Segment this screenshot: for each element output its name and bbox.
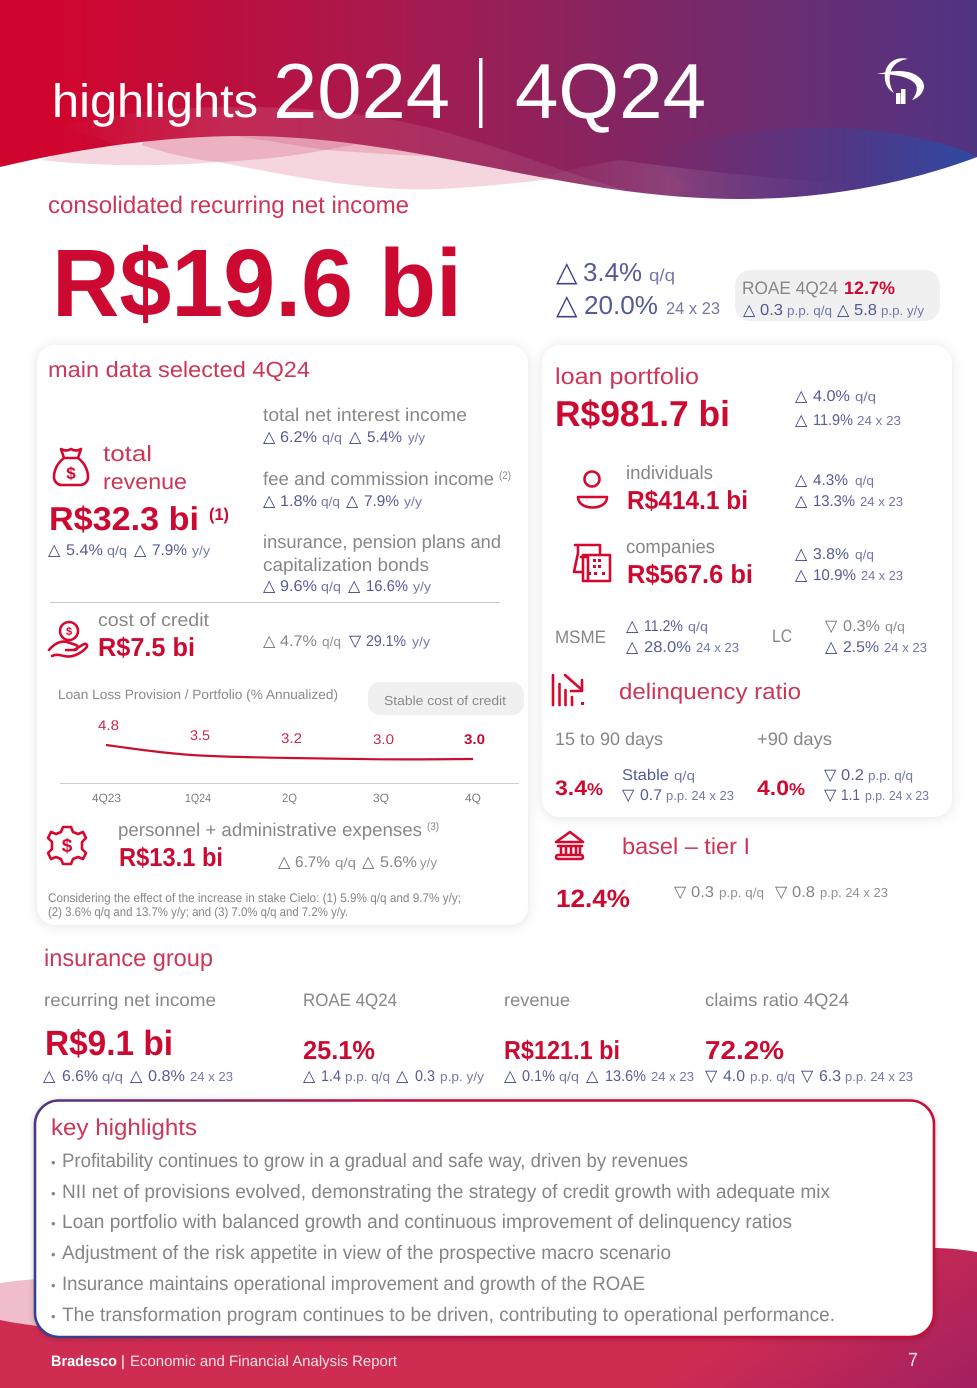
basel variations: ▽ [775, 882, 788, 901]
loan portfolio variations: 4.0% [813, 388, 850, 405]
companies: △ [795, 565, 808, 584]
insurance, pension plans and capitalization bonds: 9.6% [280, 578, 317, 595]
line chart: loan loss provision: 3.0 [464, 731, 485, 747]
cost of credit: ▽ [349, 631, 362, 650]
icon: buildings [574, 545, 610, 581]
fee and commission income: △ [346, 491, 359, 510]
personnel + administrative expenses: personnel + administrative expenses [118, 819, 422, 840]
insurance: claims ratio: 4.0 [723, 1068, 745, 1085]
insurance: revenue: revenue [504, 990, 570, 1010]
insurance: revenue: 0.1% [522, 1068, 555, 1085]
total revenue variations: q/q [107, 543, 127, 558]
bullet list: Insurance maintains operational improvement and growth of the ROAE [62, 1273, 645, 1295]
LC [772, 616, 927, 656]
personnel + administrative expenses: △ [362, 852, 375, 871]
total revenue label [103, 441, 187, 494]
companies: 24 x 23 [861, 568, 903, 583]
delinquency +90 days: p.p. q/q [868, 768, 913, 783]
insurance: recurring net income: q/q [102, 1069, 123, 1084]
insurance: revenue [504, 990, 694, 1085]
insurance: revenue: △ [586, 1066, 599, 1085]
heading: loan portfolio: loan portfolio [555, 363, 699, 389]
bullet list: • [51, 1278, 56, 1293]
icon: money bag: $ [66, 464, 76, 483]
personnel + administrative expenses: △ [278, 852, 291, 871]
insurance: ROAE: 1.4 [321, 1068, 341, 1085]
callout: ROAE: 12.7% [844, 278, 895, 298]
total revenue label: revenue [103, 469, 187, 494]
insurance: recurring net income: 24 x 23 [190, 1069, 233, 1084]
footer text: Bradesco [51, 1353, 117, 1370]
footnote [48, 891, 461, 919]
callout: ROAE: 0.3 [760, 302, 783, 319]
insurance: claims ratio: p.p. q/q [750, 1069, 795, 1084]
icon: hand with coin: $ [66, 626, 72, 638]
LC: 0.3% [843, 618, 880, 635]
MSME: 28.0% [644, 639, 691, 656]
insurance: ROAE: △ [303, 1066, 316, 1085]
footer wave [0, 1248, 977, 1388]
insurance: recurring net income: △ [130, 1066, 143, 1085]
individuals: △ [795, 470, 808, 489]
bullet list: • [51, 1216, 56, 1231]
total revenue value: (1) [209, 505, 229, 524]
LC: 24 x 23 [884, 640, 927, 655]
total net interest income: y/y [408, 430, 425, 445]
total net interest income: total net interest income [263, 404, 467, 425]
fee and commission income: (2) [499, 470, 511, 482]
basel variations: p.p. q/q [719, 885, 764, 900]
callout: ROAE: △ [743, 300, 756, 319]
personnel + administrative expenses: 5.6% [380, 854, 417, 871]
insurance, pension plans and capitalization bonds: q/q [321, 579, 341, 594]
basel variations: ▽ [674, 882, 687, 901]
insurance, pension plans and capitalization bonds: 16.6% [366, 578, 408, 595]
personnel + administrative expenses [118, 819, 439, 872]
cost of credit: cost of credit [98, 609, 209, 630]
big number: net income: R$19.6 bi [52, 230, 462, 337]
delinquency +90 days: ▽ [824, 785, 837, 804]
insurance: claims ratio: 72.2% [705, 1035, 784, 1065]
icon: hand with coin [49, 622, 87, 657]
insurance: recurring net income: 0.8% [148, 1068, 185, 1085]
total revenue variations [48, 540, 211, 559]
total revenue variations: 5.4% [66, 542, 103, 559]
total revenue variations: y/y [192, 543, 211, 558]
insurance: claims ratio: claims ratio 4Q24 [705, 990, 849, 1010]
delinquency +90 days: p.p. 24 x 23 [865, 788, 929, 803]
heading: key highlights: key highlights [51, 1114, 197, 1140]
insurance: claims ratio: 6.3 [819, 1068, 841, 1085]
insurance: ROAE: 25.1% [303, 1035, 375, 1065]
fee and commission income: 1.8% [280, 493, 317, 510]
footnote: (2) 3.6% q/q and 13.7% y/y; and (3) 7.0% q/q and 7.2% y/y. [48, 905, 348, 919]
fee and commission income: 7.9% [364, 493, 399, 510]
companies: △ [795, 544, 808, 563]
title [52, 47, 706, 135]
callout: ROAE: ROAE 4Q24 [742, 278, 838, 298]
individuals: △ [795, 491, 808, 510]
footer text: | [121, 1353, 125, 1370]
MSME: 24 x 23 [696, 640, 739, 655]
heading: basel tier I: basel – tier I [622, 833, 750, 859]
insurance: ROAE [303, 990, 485, 1085]
insurance, pension plans and capitalization bonds: capitalization bonds [263, 554, 429, 575]
personnel + administrative expenses: 6.7% [295, 854, 330, 871]
delinquency 15 to 90 days: ▽ [622, 785, 635, 804]
net income variations: 3.4% [583, 257, 642, 287]
icon: falling bars [553, 675, 584, 705]
total net interest income: 6.2% [280, 429, 317, 446]
total net interest income [263, 404, 467, 446]
callout: stable cost of credit [368, 682, 524, 715]
delinquency 15 to 90 days: 15 to 90 days [555, 729, 663, 749]
LC: ▽ [825, 616, 838, 635]
total revenue variations: 7.9% [152, 542, 187, 559]
cost of credit: △ [263, 631, 276, 650]
bullet list: • [51, 1155, 56, 1170]
line chart: loan loss provision: 2Q [282, 791, 297, 805]
header banner [0, 0, 977, 199]
insurance, pension plans and capitalization bonds: y/y [413, 579, 432, 594]
companies: R$567.6 bi [627, 559, 753, 589]
net income variations: △ [556, 255, 578, 288]
basel variations: 0.3 [691, 884, 714, 901]
bullet list: Loan portfolio with balanced growth and continuous improvement of delinquency ratios [62, 1211, 792, 1233]
basel value: 12.4% [556, 885, 630, 913]
footnote: Considering the effect of the increase in stake Cielo: (1) 5.9% q/q and 9.7% y/y; [48, 891, 461, 905]
icon: gear with dollar: $ [62, 836, 73, 857]
line chart: loan loss provision: 3.0 [373, 731, 394, 747]
delinquency 15 to 90 days: q/q [674, 768, 695, 783]
individuals: R$414.1 bi [627, 485, 748, 515]
delinquency +90 days: 4.0 [757, 777, 789, 800]
insurance: revenue: q/q [559, 1069, 579, 1084]
bullet list: • [51, 1186, 56, 1201]
basel variations [674, 882, 888, 901]
individuals: 4.3% [813, 472, 848, 489]
callout: ROAE: p.p. q/q [787, 303, 832, 318]
companies: 10.9% [813, 567, 856, 584]
panel: loan portfolio [542, 345, 952, 817]
heading: delinquency ratio: delinquency ratio [619, 679, 801, 704]
panel: main data selected [37, 345, 528, 925]
net income variations: 24 x 23 [666, 299, 720, 318]
delinquency +90 days: 1.1 [841, 787, 860, 804]
panel: key highlights [35, 1100, 934, 1337]
bullet list: • [51, 1309, 56, 1324]
callout: ROAE: △ [837, 300, 850, 319]
line chart: loan loss provision: 4.8 [98, 717, 119, 733]
title: 4Q24 [515, 47, 706, 135]
line chart: loan loss provision: 4Q [465, 791, 481, 805]
net income variations: 20.0% [584, 290, 658, 320]
individuals [626, 463, 903, 515]
LC: 2.5% [843, 639, 879, 656]
cost of credit [98, 609, 431, 662]
cost of credit: y/y [412, 634, 431, 649]
insurance: revenue: △ [504, 1066, 517, 1085]
companies [626, 537, 903, 589]
callout: ROAE: 5.8 [854, 302, 877, 319]
personnel + administrative expenses: q/q [335, 855, 356, 870]
cost of credit: 29.1% [366, 633, 406, 650]
LC: LC [772, 626, 792, 646]
basel variations: 0.8 [792, 884, 815, 901]
delinquency 15 to 90 days: p.p. 24 x 23 [666, 788, 734, 803]
net income variations: △ [556, 288, 578, 321]
total net interest income: △ [349, 427, 362, 446]
icon: money bag [54, 449, 88, 485]
fee and commission income: q/q [321, 494, 340, 509]
insurance: claims ratio: ▽ [705, 1066, 718, 1085]
personnel + administrative expenses: (3) [427, 821, 439, 833]
line chart: loan loss provision [60, 717, 519, 805]
bullet list [51, 1150, 835, 1326]
cost of credit: 4.7% [280, 633, 317, 650]
total revenue value: R$32.3 bi [49, 500, 199, 537]
loan portfolio value: R$981.7 bi [555, 393, 730, 434]
title: highlights [52, 74, 258, 127]
companies: companies [626, 537, 715, 558]
delinquency +90 days [757, 729, 929, 804]
insurance, pension plans and capitalization bonds: △ [263, 576, 276, 595]
MSME: △ [626, 616, 639, 635]
insurance: revenue: 13.6% [605, 1068, 646, 1085]
insurance: ROAE: p.p. y/y [440, 1069, 485, 1084]
insurance: ROAE: △ [396, 1066, 409, 1085]
MSME: MSME [555, 627, 606, 647]
callout: ROAE: p.p. y/y [881, 303, 924, 318]
loan portfolio variations: q/q [855, 389, 876, 404]
LC: △ [825, 637, 838, 656]
net income variations: q/q [649, 266, 675, 285]
insurance: recurring net income: recurring net income [44, 990, 216, 1010]
total revenue variations: △ [134, 540, 147, 559]
title: 2024 [273, 47, 450, 135]
insurance: ROAE: p.p. q/q [345, 1069, 390, 1084]
insurance: recurring net income: R$9.1 bi [45, 1024, 173, 1063]
icon: bank building [556, 832, 583, 859]
delinquency 15 to 90 days: Stable [622, 767, 669, 784]
line chart: loan loss provision: 3.2 [281, 730, 302, 746]
insurance, pension plans and capitalization bonds: insurance, pension plans and [263, 531, 501, 552]
MSME: △ [626, 637, 639, 656]
delinquency 15 to 90 days [555, 729, 734, 804]
basel variations: p.p. 24 x 23 [820, 885, 888, 900]
bullet list: Adjustment of the risk appetite in view of the prospective macro scenario [62, 1242, 671, 1264]
icon: bank logo [877, 58, 924, 104]
insurance: recurring net income [43, 990, 233, 1085]
icon: gear with dollar [48, 827, 86, 864]
individuals: 24 x 23 [860, 494, 903, 509]
line chart: loan loss provision: 3Q [373, 791, 389, 805]
heading: consolidated recurring net income: consolidated recurring net income [48, 192, 409, 219]
loan portfolio variations: △ [795, 386, 808, 405]
bullet list: Profitability continues to grow in a gradual and safe way, driven by revenues [62, 1150, 688, 1172]
fee and commission income [263, 468, 511, 510]
fee and commission income: △ [263, 491, 276, 510]
insurance: revenue: R$121.1 bi [504, 1035, 620, 1065]
insurance, pension plans and capitalization bonds: △ [348, 576, 361, 595]
line chart: loan loss provision: 4Q23 [92, 791, 121, 805]
insurance: recurring net income: △ [43, 1066, 56, 1085]
fee and commission income: y/y [404, 494, 423, 509]
individuals: q/q [855, 473, 874, 488]
bullet list: NII net of provisions evolved, demonstrating the strategy of credit growth with adequate mix [62, 1181, 830, 1203]
loan portfolio variations: 11.9% [813, 412, 853, 429]
delinquency 15 to 90 days: % [587, 780, 603, 799]
line chart: loan loss provision: 3.5 [190, 727, 210, 743]
insurance: claims ratio: p.p. 24 x 23 [845, 1069, 913, 1084]
delinquency +90 days: % [789, 780, 805, 799]
MSME: 11.2% [644, 618, 683, 635]
delinquency 15 to 90 days: 0.7 [640, 787, 662, 804]
fee and commission income: fee and commission income [263, 468, 494, 489]
delinquency +90 days: ▽ [824, 765, 837, 784]
insurance, pension plans and capitalization bonds [263, 531, 501, 595]
insurance: recurring net income: 6.6% [62, 1068, 98, 1085]
loan portfolio variations [795, 386, 901, 429]
LC: q/q [885, 619, 905, 634]
MSME: q/q [688, 619, 708, 634]
delinquency +90 days: +90 days [757, 729, 832, 749]
MSME [555, 616, 739, 656]
bullet list: The transformation program continues to be driven, contributing to operational performance. [62, 1304, 835, 1326]
companies: q/q [855, 547, 874, 562]
loan portfolio variations: △ [795, 410, 808, 429]
total net interest income: △ [263, 427, 276, 446]
insurance: revenue: 24 x 23 [651, 1069, 694, 1084]
icon: person [578, 472, 607, 508]
insurance: claims ratio [705, 990, 913, 1085]
companies: 3.8% [813, 546, 849, 563]
page number: 7 [908, 1350, 918, 1371]
callout: ROAE [735, 270, 940, 321]
total revenue label: total [103, 441, 152, 466]
footer text: Economic and Financial Analysis Report [130, 1353, 398, 1370]
total revenue variations: △ [48, 540, 61, 559]
delinquency +90 days: 0.2 [841, 767, 864, 784]
individuals: 13.3% [813, 493, 855, 510]
personnel + administrative expenses: R$13.1 bi [119, 842, 223, 872]
line chart: loan loss provision: 1Q24 [185, 791, 211, 805]
individuals: individuals [626, 463, 713, 484]
cost of credit: R$7.5 bi [98, 632, 195, 662]
cost of credit: q/q [322, 634, 341, 649]
total net interest income: q/q [322, 430, 342, 445]
loan portfolio variations: 24 x 23 [857, 413, 901, 428]
total net interest income: 5.4% [367, 429, 402, 446]
heading: insurance group: insurance group [44, 945, 213, 972]
delinquency 15 to 90 days: 3.4 [555, 777, 587, 800]
insurance: ROAE: 0.3 [415, 1068, 435, 1085]
chart title: Loan Loss Provision / Portfolio (% Annualized) [58, 687, 338, 702]
callout: stable cost of credit: Stable cost of credit [384, 693, 506, 708]
insurance: ROAE: ROAE 4Q24 [303, 990, 397, 1010]
heading: main data: main data selected 4Q24 [48, 357, 310, 382]
bullet list: • [51, 1247, 56, 1262]
personnel + administrative expenses: y/y [420, 855, 437, 870]
insurance: claims ratio: ▽ [801, 1066, 814, 1085]
net income variations [556, 255, 720, 321]
